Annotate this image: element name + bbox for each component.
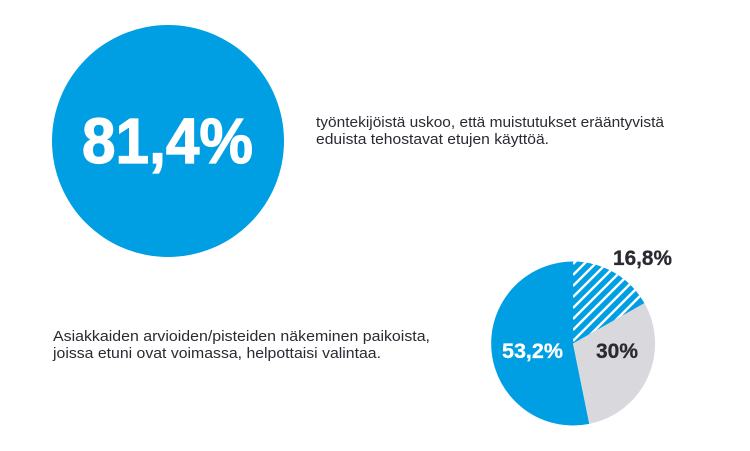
slice: 30% grey [573,303,655,424]
text block: customer reviews statement: joissa etuni ovat voimassa, helpottaisi valintaa. [52,346,381,362]
label: 53,2%: 53,2% [502,340,563,363]
stat circle: 81,4%: 81,4% [82,105,253,177]
text block: reminders statement: työntekijöistä uskoo, että muistutukset erääntyvistä [316,115,665,131]
slice: 53,2% solid blue [491,262,589,425]
text block: customer reviews statement [52,329,430,362]
label: 16,8%: 16,8% [613,247,672,270]
slice: 16,8% hatched blue [573,262,644,344]
text block: reminders statement: eduista tehostavat etujen käyttöä. [316,132,549,148]
text block: reminders statement [316,115,665,148]
pie chart [491,250,672,426]
label: 30%: 30% [596,340,638,363]
stat circle: 81,4% [52,25,284,257]
text block: customer reviews statement: Asiakkaiden arvioiden/pisteiden näkeminen paikoista, [53,329,430,345]
